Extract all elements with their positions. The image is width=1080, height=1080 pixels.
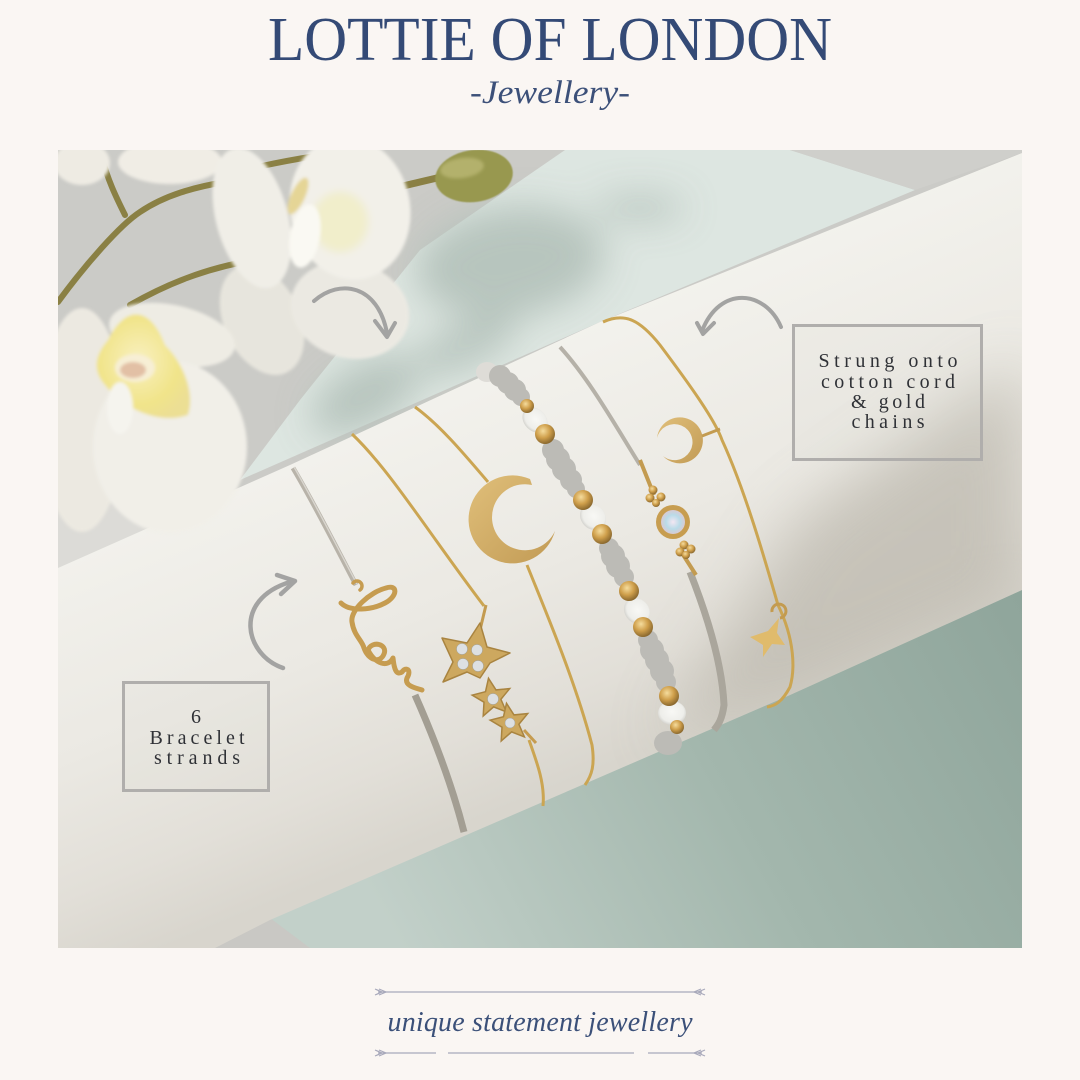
pale green board [240,150,915,480]
flower lower left [58,307,111,532]
flower upper [219,266,305,376]
bracelet: grey cord with love charm [293,467,464,832]
arrow: upper flower [314,288,395,337]
photo background [58,150,1022,948]
callout: 6 bracelet strands [124,682,268,790]
tagline top divider [375,989,705,995]
arrow: towards love charm [250,575,295,668]
bracelet: grey cord with opal [560,347,724,730]
orchid flowers [58,150,412,532]
tagline: unique statement jewellery [388,1007,693,1038]
lower floor [262,585,1022,948]
bracelet: chain with large crescent [415,407,593,785]
callout: strung onto cotton cord: Strung onto [818,350,958,372]
callout: strung onto cotton cord: chains [852,411,925,433]
arrow: towards gold chain [697,298,781,334]
callout: strung onto cotton cord [794,326,982,460]
bracelet: chain with star charms [352,434,543,806]
leaf shadow on board [298,194,685,451]
callout: 6 bracelet strands: 6 [191,706,201,728]
star charms [442,623,510,682]
callout: strung onto cotton cord: & gold [851,391,925,413]
bracelet: chain with small moon and star [603,318,793,707]
white tube [58,153,1022,948]
title: LOTTIE OF LONDON [268,6,832,74]
subtitle: -Jewellery- [470,75,630,111]
flower top left petals [58,150,111,186]
stem and bud [58,145,516,305]
bracelet: beads [476,362,686,755]
tube shading [660,360,1022,740]
callout: strung onto cotton cord: cotton cord [821,371,955,393]
callout: 6 bracelet strands: strands [154,747,240,769]
tagline bottom divider [375,1050,705,1056]
photo: bracelets on white tube [40,125,1022,948]
callout: 6 bracelet strands: Bracelet [150,727,245,749]
